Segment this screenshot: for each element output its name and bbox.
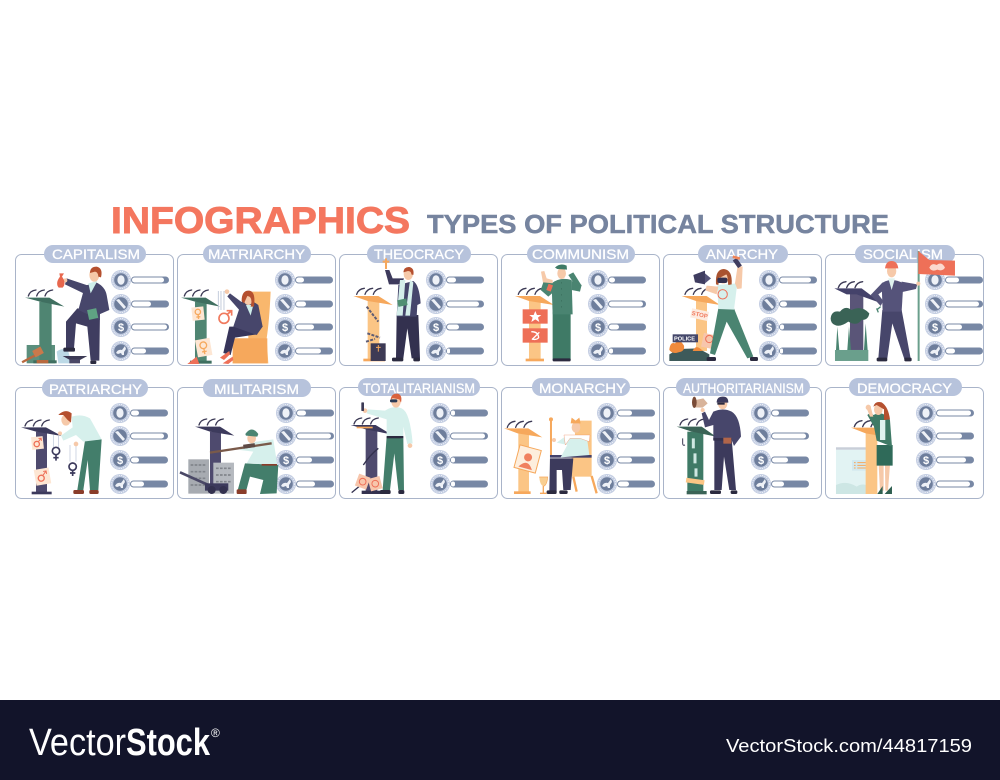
indicator: force — [111, 294, 169, 314]
indicator: force — [759, 294, 817, 314]
indicator: money: $ — [604, 455, 610, 467]
indicator: freedom — [111, 341, 169, 361]
indicator: freedom — [925, 341, 983, 361]
illustration: patriarchy man with puppets — [21, 411, 102, 494]
footer logo: Stock — [126, 722, 211, 764]
panel: matriarchy: MATRIARCHY — [208, 246, 306, 262]
indicator: freedom — [110, 474, 168, 494]
indicator: money — [916, 450, 974, 470]
panel: matriarchy — [178, 245, 336, 366]
indicator: rule — [276, 403, 334, 423]
indicator: force — [597, 426, 655, 446]
illustration: authoritarianism officer with megaphone — [677, 397, 741, 494]
indicator: money — [925, 317, 983, 337]
indicator: money: $ — [437, 455, 443, 467]
indicator: rule — [597, 403, 655, 423]
illustration: totalitarianism man with sunglasses — [351, 394, 413, 494]
panel: totalitarianism — [340, 378, 498, 498]
footer bar — [0, 700, 1000, 780]
indicator: force — [110, 426, 168, 446]
indicator: force — [426, 294, 484, 314]
indicator: rule — [916, 403, 974, 423]
indicator: money: $ — [118, 322, 124, 334]
indicator: rule — [275, 270, 333, 290]
illustration: militarism soldier aiming rifle — [180, 419, 278, 494]
indicator: freedom — [916, 474, 974, 494]
indicator: money: $ — [282, 322, 288, 334]
indicator: money: $ — [433, 322, 439, 334]
indicator: money — [597, 450, 655, 470]
illustration: matriarchy woman on throne — [181, 289, 271, 364]
indicator: force — [276, 426, 334, 446]
illustration: anarchy protester with megaphone: POLICE — [674, 336, 695, 342]
indicator: money: $ — [923, 455, 929, 467]
indicator: freedom — [588, 341, 646, 361]
indicator: money: $ — [283, 455, 289, 467]
indicator: money: $ — [595, 322, 601, 334]
subtitle: TYPES OF POLITICAL STRUCTURE — [427, 209, 889, 239]
indicator: rule — [426, 270, 484, 290]
panel: capitalism — [16, 245, 174, 366]
panel: authoritarianism — [664, 378, 822, 498]
illustration: democracy woman at podium with ballot box — [836, 402, 893, 494]
illustration: communism soldier saluting — [515, 265, 582, 361]
indicator: rule — [110, 403, 168, 423]
indicator: money: $ — [766, 322, 772, 334]
indicator: money — [276, 450, 334, 470]
illustration: capitalism businessman at podium — [22, 267, 109, 364]
indicator: force — [925, 294, 983, 314]
panel: democracy — [826, 378, 984, 498]
illustration: monarchy king on throne — [504, 417, 597, 494]
indicator: money — [110, 450, 168, 470]
panel: democracy: DEMOCRACY — [857, 380, 953, 396]
illustration: socialism worker with flag — [831, 251, 955, 361]
indicator: freedom — [759, 341, 817, 361]
indicator: money: $ — [932, 322, 938, 334]
indicator: freedom — [426, 341, 484, 361]
indicator: freedom — [430, 474, 488, 494]
footer image id: VectorStock.com/44817159 — [726, 736, 972, 756]
panel: anarchy: ANARCHY — [706, 246, 779, 262]
indicator: freedom — [275, 341, 333, 361]
panel: militarism: MILITARISM — [214, 381, 299, 397]
indicator: money — [759, 317, 817, 337]
panel: socialism — [826, 245, 984, 366]
indicator: rule — [588, 270, 646, 290]
panel: patriarchy: PATRIARCHY — [49, 381, 143, 397]
panel: theocracy — [340, 245, 498, 366]
footer logo — [29, 722, 220, 764]
indicator: rule — [925, 270, 983, 290]
illustration: theocracy priest at podium — [353, 258, 421, 361]
indicator: money — [588, 317, 646, 337]
panel: capitalism: CAPITALISM — [52, 246, 140, 262]
footer logo: Vector — [29, 722, 126, 764]
indicator: force — [588, 294, 646, 314]
indicator: force — [430, 426, 488, 446]
indicator: force — [751, 426, 809, 446]
indicator: rule — [759, 270, 817, 290]
footer logo: ® — [211, 726, 220, 740]
illustration: anarchy protester with megaphone — [669, 255, 758, 361]
panel: theocracy: THEOCRACY — [374, 246, 465, 262]
indicator: rule — [111, 270, 169, 290]
indicator: money — [751, 450, 809, 470]
panel: authoritarianism: AUTHORITARIANISM — [683, 380, 804, 396]
indicator: money — [275, 317, 333, 337]
panel: socialism: SOCIALISM — [863, 246, 943, 262]
indicator: freedom — [597, 474, 655, 494]
panel: patriarchy — [16, 379, 174, 498]
panel: monarchy — [502, 378, 660, 498]
indicator: money: $ — [117, 455, 123, 467]
indicator: money — [111, 317, 169, 337]
indicator: rule — [751, 403, 809, 423]
panel: monarchy: MONARCHY — [539, 380, 627, 396]
indicator: rule — [430, 403, 488, 423]
indicator: freedom — [276, 474, 334, 494]
indicator: force — [916, 426, 974, 446]
panel: anarchy — [664, 245, 822, 366]
panel: totalitarianism: TOTALITARIANISM — [363, 380, 475, 396]
indicator: money: $ — [758, 455, 764, 467]
indicator: money — [426, 317, 484, 337]
indicator: money — [430, 450, 488, 470]
illustration: anarchy protester with megaphone: STOP — [691, 311, 708, 320]
title: INFOGRAPHICS — [111, 200, 410, 241]
indicator: force — [275, 294, 333, 314]
panel: communism: COMMUNISM — [532, 246, 629, 262]
indicator: freedom — [751, 474, 809, 494]
panel: militarism — [178, 379, 336, 498]
panel: communism — [502, 245, 660, 366]
